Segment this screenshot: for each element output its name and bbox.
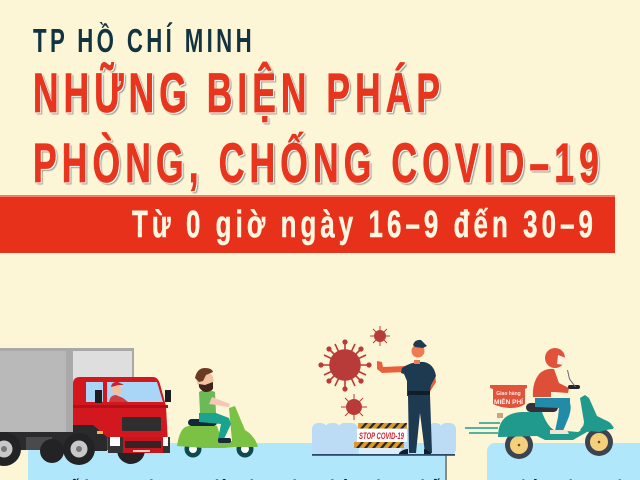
- icon: water barriers: [312, 423, 456, 455]
- delivery box: [490, 385, 527, 408]
- driver: [109, 382, 128, 402]
- delivery box: Giao hàng: [496, 391, 521, 397]
- icon: delivery rider on teal scooter: [465, 348, 614, 459]
- scooter body: [498, 395, 613, 440]
- front wheel: [585, 428, 613, 456]
- icon: medium virus: [341, 394, 367, 420]
- icon: large virus: [319, 340, 371, 391]
- red date banner: [0, 195, 615, 253]
- rear wheel: [505, 431, 533, 459]
- subtitle: city name: TP HỒ CHÍ MINH: [33, 22, 255, 59]
- icon: delivery truck: [0, 348, 171, 466]
- delivery box: MIỄN PHÍ: [494, 397, 523, 406]
- icon: police officer: [377, 340, 436, 455]
- barrier sign text: STOP COVID-19: [359, 431, 404, 442]
- icon: small virus top: [370, 326, 390, 346]
- panel: right blue card: [487, 443, 640, 480]
- icon: man on green scooter: [177, 368, 258, 458]
- panel: left blue card: [28, 443, 447, 480]
- icon: stop covid barrier: [354, 423, 407, 454]
- rider: [535, 398, 571, 431]
- speed lines: [465, 423, 500, 433]
- platform line: [312, 454, 455, 456]
- handlebar and mirror: [568, 385, 580, 389]
